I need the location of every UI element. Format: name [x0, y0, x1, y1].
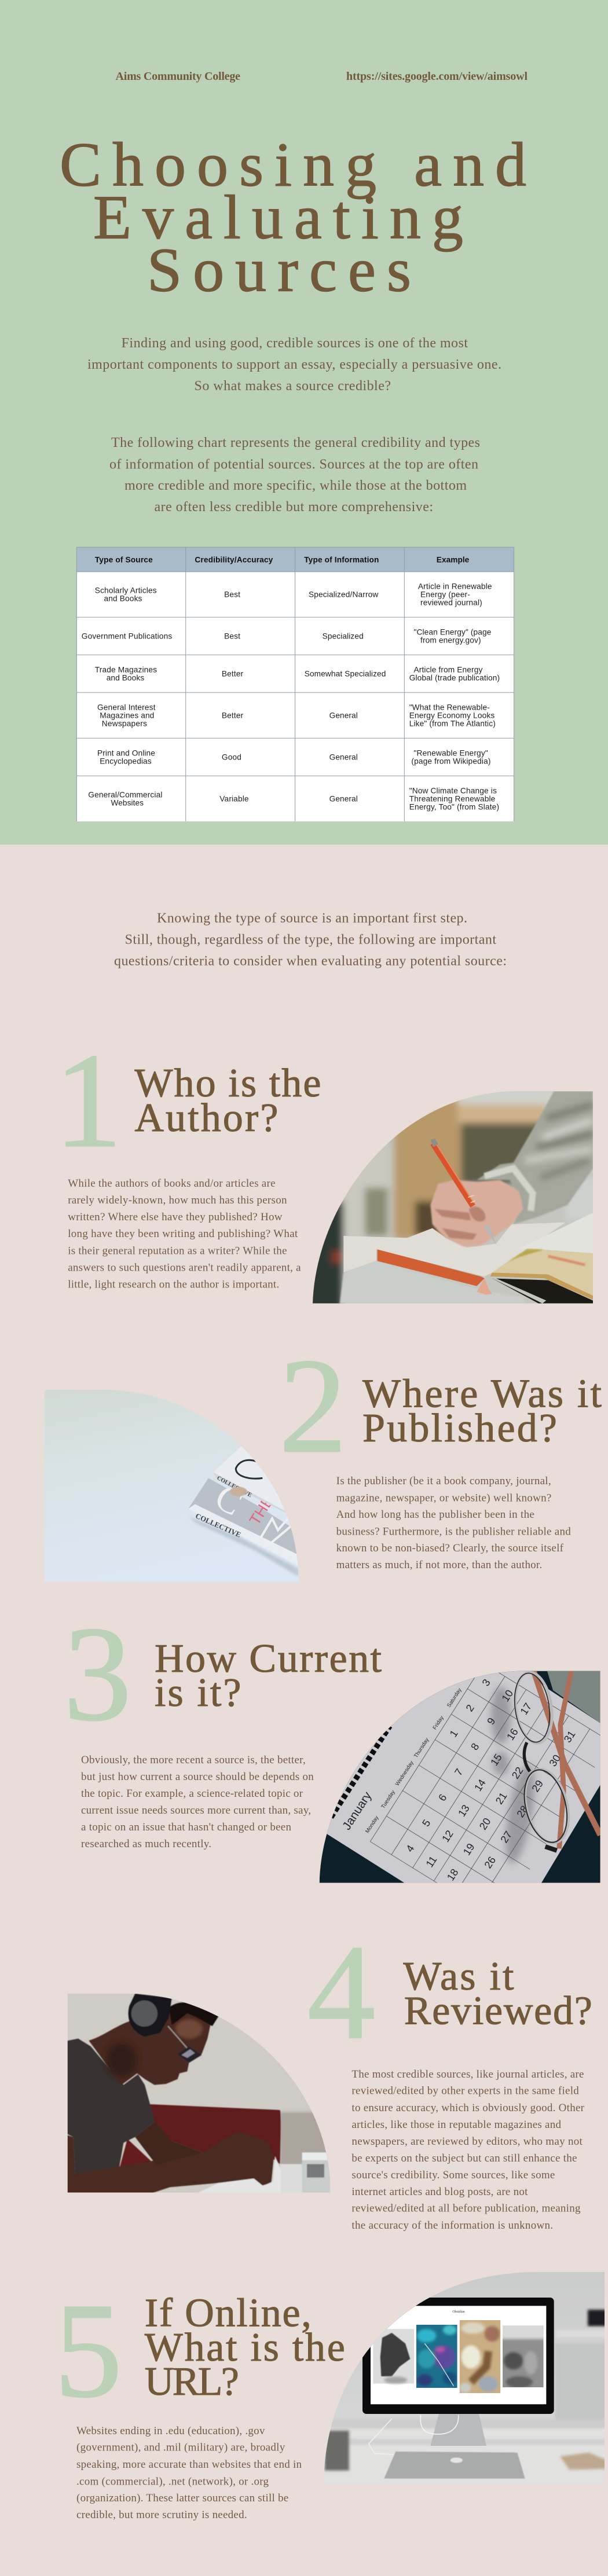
calendar labels: 18	[445, 1867, 461, 1883]
calendar labels: Monday	[364, 1815, 380, 1834]
upper magazine	[213, 1446, 285, 1511]
table row: encyclopedias: "Renewable Energy"	[413, 748, 488, 757]
section 4 body text: The most credible sources, like journal articles, are	[351, 2068, 584, 2080]
section 1 body text	[68, 1177, 301, 1291]
table row: general interest: "What the Renewable-	[409, 703, 490, 711]
text block: introduction: Finding and using good, credible sources is one of the most	[122, 336, 468, 351]
calendar labels: 5	[420, 1818, 433, 1829]
sweater	[477, 1091, 593, 1224]
section 5 heading: What is the	[145, 2325, 345, 2370]
sofa	[149, 2104, 281, 2164]
table row: trade: Global (trade publication)	[409, 673, 500, 682]
section 1 body text: is their general reputation as a writer? While the	[68, 1245, 287, 1257]
section 1 body text: long have they been writing and publishing? What	[68, 1228, 298, 1240]
screen panel: teal mineral	[416, 2325, 457, 2388]
table row: scholarly: Scholarly Articles	[95, 586, 157, 595]
table row: websites: General/Commercial	[88, 790, 162, 799]
text block: introduction: important components to support an essay, especially a persuasive one.	[87, 357, 501, 372]
calendar labels: 10	[499, 1687, 515, 1704]
text block: chart introduction: are often less credible but more comprehensive:	[154, 500, 433, 515]
headphones	[129, 1994, 172, 2036]
table header row: Example	[437, 556, 470, 564]
section 4 number: 4	[307, 1917, 375, 2067]
text block: introduction	[87, 336, 501, 394]
calendar labels: 13	[456, 1803, 472, 1819]
text block: criteria introduction	[114, 911, 507, 968]
calendar labels: 2	[464, 1702, 477, 1713]
table row: government: Specialized	[323, 632, 364, 640]
screen panel: grey rock	[373, 2329, 414, 2384]
laptop	[384, 2452, 525, 2479]
table row: general interest: Like" (from The Atlantic)	[409, 719, 496, 728]
table row: websites: Websites	[111, 798, 144, 807]
section 3 body text: the topic. For example, a science-related topic or	[81, 1788, 303, 1800]
lower magazine	[188, 1478, 299, 1565]
section 3 body text: current issue needs sources more current than, say,	[81, 1804, 311, 1817]
calendar labels: 20	[477, 1816, 493, 1832]
section 4 body text: reviewed/edited by other experts in the same field	[351, 2085, 579, 2097]
section 5 body text	[76, 2425, 302, 2521]
table row: scholarly: Best	[224, 590, 240, 599]
table row: websites: "Now Climate Change is	[409, 786, 497, 795]
orange page edge	[378, 1249, 485, 1286]
section 4 body text: to ensure accuracy, which is obviously good. Other	[351, 2102, 585, 2114]
table header row	[95, 556, 470, 564]
table row: trade: Trade Magazines	[95, 665, 157, 674]
text block: criteria introduction: questions/criteria to consider when evaluating any potential source:	[114, 953, 507, 968]
header: college and url: https://sites.google.com/view/aimsowl	[346, 70, 528, 83]
paper	[198, 2156, 280, 2193]
table row: general interest: General	[329, 711, 358, 720]
section 2 body text: Is the publisher (be it a book company, journal,	[336, 1475, 551, 1487]
hand	[430, 1180, 523, 1246]
section 3 body text: but just how current a source should be depends on	[81, 1771, 314, 1783]
section 2 body text	[336, 1475, 571, 1571]
table row: government: "Clean Energy" (page	[413, 628, 491, 636]
table row: trade: Article from Energy	[413, 665, 482, 674]
table row: websites: General	[329, 794, 358, 803]
section 5 body text: .com (commercial), .net (network), or .org	[76, 2475, 269, 2487]
section 5 body text: (organization). These latter sources can still be	[76, 2492, 288, 2504]
text block: chart introduction: The following chart represents the general credibility and types	[111, 435, 480, 450]
table row: trade: Better	[222, 669, 244, 678]
title: Sources	[147, 236, 422, 304]
section 5 body text: credible, but more scrutiny is needed.	[76, 2509, 247, 2521]
calendar labels: Tuesday	[380, 1789, 396, 1810]
monitor stand	[430, 2413, 486, 2446]
calendar labels: 30	[547, 1752, 563, 1768]
calendar labels: 16	[504, 1726, 521, 1742]
table row: government: Government Publications	[82, 632, 172, 640]
table row: general interest: Newspapers	[102, 719, 147, 728]
calendar labels	[340, 1677, 577, 1883]
calendar labels: 3	[480, 1677, 493, 1688]
text block: criteria introduction: Knowing the type of source is an important first step.	[157, 911, 467, 926]
section 1 heading	[134, 1061, 321, 1140]
calendar labels: Friday	[431, 1715, 445, 1731]
text block: chart introduction: more credible and more specific, while those at the bottom	[124, 478, 467, 493]
section 4 body text	[351, 2068, 585, 2232]
table row: trade: and Books	[107, 673, 144, 682]
section 4 photo: man reading with headphones	[64, 1988, 338, 2197]
calendar labels: 21	[493, 1790, 510, 1807]
text block: chart introduction	[109, 435, 480, 515]
table row: scholarly: Article in Renewable	[418, 582, 492, 590]
section 3 heading: is it?	[155, 1671, 241, 1715]
section 1 body text: rarely widely-known, how much has this person	[68, 1194, 287, 1206]
section 1 body text: little, light research on the author is important.	[68, 1278, 279, 1291]
section 2 number: 2	[279, 1330, 347, 1481]
table and glass	[280, 2164, 334, 2197]
section 2 heading: Where Was it	[362, 1372, 602, 1417]
section 2 photo: magazines: C	[208, 1476, 250, 1524]
calendar labels: 31	[562, 1729, 577, 1745]
section 5 body text: speaking, more accurate than websites that end in	[76, 2458, 302, 2471]
section 2 photo: magazines: THE	[246, 1493, 277, 1528]
section 1 body text: While the authors of books and/or articles are	[68, 1177, 275, 1190]
table row: general interest: Energy Economy Looks	[409, 711, 495, 720]
calendar labels: 14	[472, 1777, 488, 1793]
title: Choosing and	[60, 130, 537, 199]
table row: encyclopedias	[97, 748, 490, 765]
calendar labels: 19	[461, 1841, 477, 1858]
table header row: Credibility/Accuracy	[195, 556, 273, 564]
table row: general interest: Better	[222, 711, 244, 720]
calendar spiral	[331, 1726, 390, 1817]
calendar shadows	[491, 1686, 540, 1865]
screen panel: grey mineral	[503, 2325, 544, 2387]
section 2 body text: magazine, newspaper, or website) well known?	[336, 1492, 551, 1504]
table row: general interest: General Interest	[97, 703, 156, 711]
text block: chart introduction: of information of potential sources. Sources at the top are often	[109, 457, 478, 472]
section 5 heading	[145, 2291, 345, 2404]
table: types of source	[76, 547, 514, 821]
section 5 photo: desktop monitor	[324, 2272, 605, 2480]
calendar labels: 4	[404, 1843, 416, 1854]
section 4 body text: articles, like those in reputable magazines and	[351, 2119, 562, 2131]
section 5 number: 5	[54, 2275, 122, 2425]
section 2 photo: magazines	[44, 1390, 299, 1581]
section 1 body text: answers to such questions aren't readily apparent, a	[68, 1261, 301, 1274]
calendar labels: Thursday	[413, 1737, 430, 1759]
section 3 heading	[155, 1636, 382, 1715]
table row: encyclopedias: (page from Wikipedia)	[411, 757, 490, 765]
calendar labels: 17	[518, 1701, 534, 1717]
glasses	[511, 1670, 600, 1851]
table header row: Type of Source	[95, 556, 153, 564]
eyeglasses	[168, 2026, 187, 2048]
section 2 heading	[362, 1372, 602, 1451]
monitor	[362, 2298, 554, 2414]
table row: encyclopedias: Print and Online	[97, 748, 155, 757]
calendar labels: 27	[498, 1829, 514, 1845]
section 3 body text: researched as much recently.	[81, 1838, 211, 1850]
section 5 photo: desktop monitor: Obsidian	[452, 2310, 465, 2314]
section 2 photo: magazines: COLLECTIVE	[194, 1512, 242, 1539]
section 3 heading: How Current	[155, 1636, 382, 1681]
section 4 body text: be experts on the subject but can still enhance the	[351, 2152, 577, 2164]
section 2 body text: business? Furthermore, is the publisher reliable and	[336, 1525, 571, 1537]
section 2 body text: And how long has the publisher been in the	[336, 1509, 534, 1521]
table row: government: from energy.gov)	[420, 636, 481, 644]
calendar grid	[370, 1673, 600, 1883]
table row: encyclopedias: Encyclopedias	[100, 757, 152, 765]
table row: websites: Energy, Too" (from Slate)	[409, 802, 499, 811]
open yellow pages	[492, 1249, 593, 1300]
shirt	[64, 2039, 155, 2177]
table row: general interest: Magazines and	[100, 711, 154, 720]
text block: criteria introduction: Still, though, regardless of the type, the following are important	[125, 933, 496, 948]
section 1 number: 1	[54, 1025, 122, 1176]
table row: scholarly: Energy (peer-	[420, 590, 470, 599]
section 5 body text: Websites ending in .edu (education), .gov	[76, 2425, 265, 2437]
section 4 body text: newspapers, are reviewed by editors, who may not	[351, 2135, 583, 2148]
pen	[433, 1143, 473, 1206]
section 4 body text: reviewed/edited at all before publication, meaning	[351, 2203, 581, 2215]
arm	[64, 2131, 274, 2197]
notebook pages	[343, 1223, 566, 1276]
table row: trade	[95, 665, 500, 682]
section 2 body text: known to be non-biased? Clearly, the source itself	[336, 1542, 564, 1554]
section 1 heading: Author?	[134, 1096, 278, 1140]
section 1 heading: Who is the	[134, 1061, 321, 1106]
calendar labels: 6	[436, 1792, 449, 1803]
calendar labels: 22	[510, 1765, 526, 1781]
calendar labels: 8	[468, 1741, 481, 1752]
text block: introduction: So what makes a source credible?	[195, 379, 391, 394]
table row: websites: Threatening Renewable	[409, 794, 495, 803]
calendar labels: 15	[488, 1752, 504, 1768]
calendar labels: 11	[424, 1854, 439, 1869]
section 4 heading: Was it	[403, 1954, 514, 1999]
calendar labels: 28	[514, 1803, 530, 1819]
calendar labels: Wednesday	[394, 1760, 415, 1787]
section 5 heading: URL?	[145, 2360, 239, 2404]
section 2 heading: Published?	[362, 1406, 557, 1451]
section 4 body text: the accuracy of the information is unknown.	[351, 2219, 553, 2232]
section 3 body text: a topic on an issue that hasn't changed or been	[81, 1821, 292, 1833]
calendar labels: 9	[485, 1716, 497, 1727]
panel: green header section	[0, 0, 608, 845]
calendar labels: Saturday	[446, 1687, 463, 1708]
table row: websites: Variable	[219, 794, 249, 803]
calendar labels: 12	[439, 1828, 456, 1844]
table row: scholarly	[95, 582, 492, 607]
table row: trade: Somewhat Specialized	[305, 669, 386, 678]
calendar labels: 7	[452, 1767, 465, 1778]
table row: scholarly: and Books	[104, 594, 142, 603]
section 3 photo: calendar and glasses	[320, 1671, 600, 1883]
calendar labels: 26	[482, 1854, 498, 1870]
section 4 body text: internet articles and blog posts, are not	[351, 2186, 528, 2198]
section 5 body text: (government), and .mil (military) are, broadly	[76, 2442, 285, 2454]
table row: government	[82, 628, 491, 644]
section 5 heading: If Online,	[145, 2291, 312, 2336]
section 1 photo: hand writing in notebook	[313, 1091, 593, 1304]
section 2 photo: magazines: COLLECTIVE	[216, 1475, 253, 1499]
table row: government: Best	[224, 632, 240, 640]
table row: encyclopedias: General	[329, 753, 358, 761]
section 4 heading: Reviewed?	[404, 1989, 592, 2034]
table row: encyclopedias: Good	[222, 753, 241, 761]
head and neck	[89, 2004, 210, 2085]
section 4 body text: source's credibility. Some sources, like some	[351, 2169, 555, 2181]
section 1 body text: written? Where else have they published? How	[68, 1211, 283, 1223]
title	[60, 130, 537, 304]
section 3 body text: Obviously, the more recent a source is, the better,	[81, 1754, 306, 1766]
section 3 number: 3	[64, 1598, 131, 1749]
calendar labels: January	[340, 1789, 375, 1832]
table row: scholarly: reviewed journal)	[420, 598, 482, 607]
screen panel: tan mineral	[460, 2320, 500, 2393]
table row: websites	[88, 786, 499, 811]
title: Evaluating	[93, 184, 474, 252]
section 4 heading	[403, 1954, 592, 2034]
calendar labels: 29	[529, 1778, 545, 1794]
header: college and url	[116, 70, 528, 83]
section 3 body text	[81, 1754, 314, 1850]
table header row: Type of Information	[304, 556, 379, 564]
table row: scholarly: Specialized/Narrow	[309, 590, 378, 599]
calendar labels: 1	[448, 1728, 460, 1739]
table row: general interest	[97, 703, 496, 728]
section 2 body text: matters as much, if not more, than the author.	[336, 1559, 542, 1571]
header: college and url: Aims Community College	[116, 70, 240, 83]
